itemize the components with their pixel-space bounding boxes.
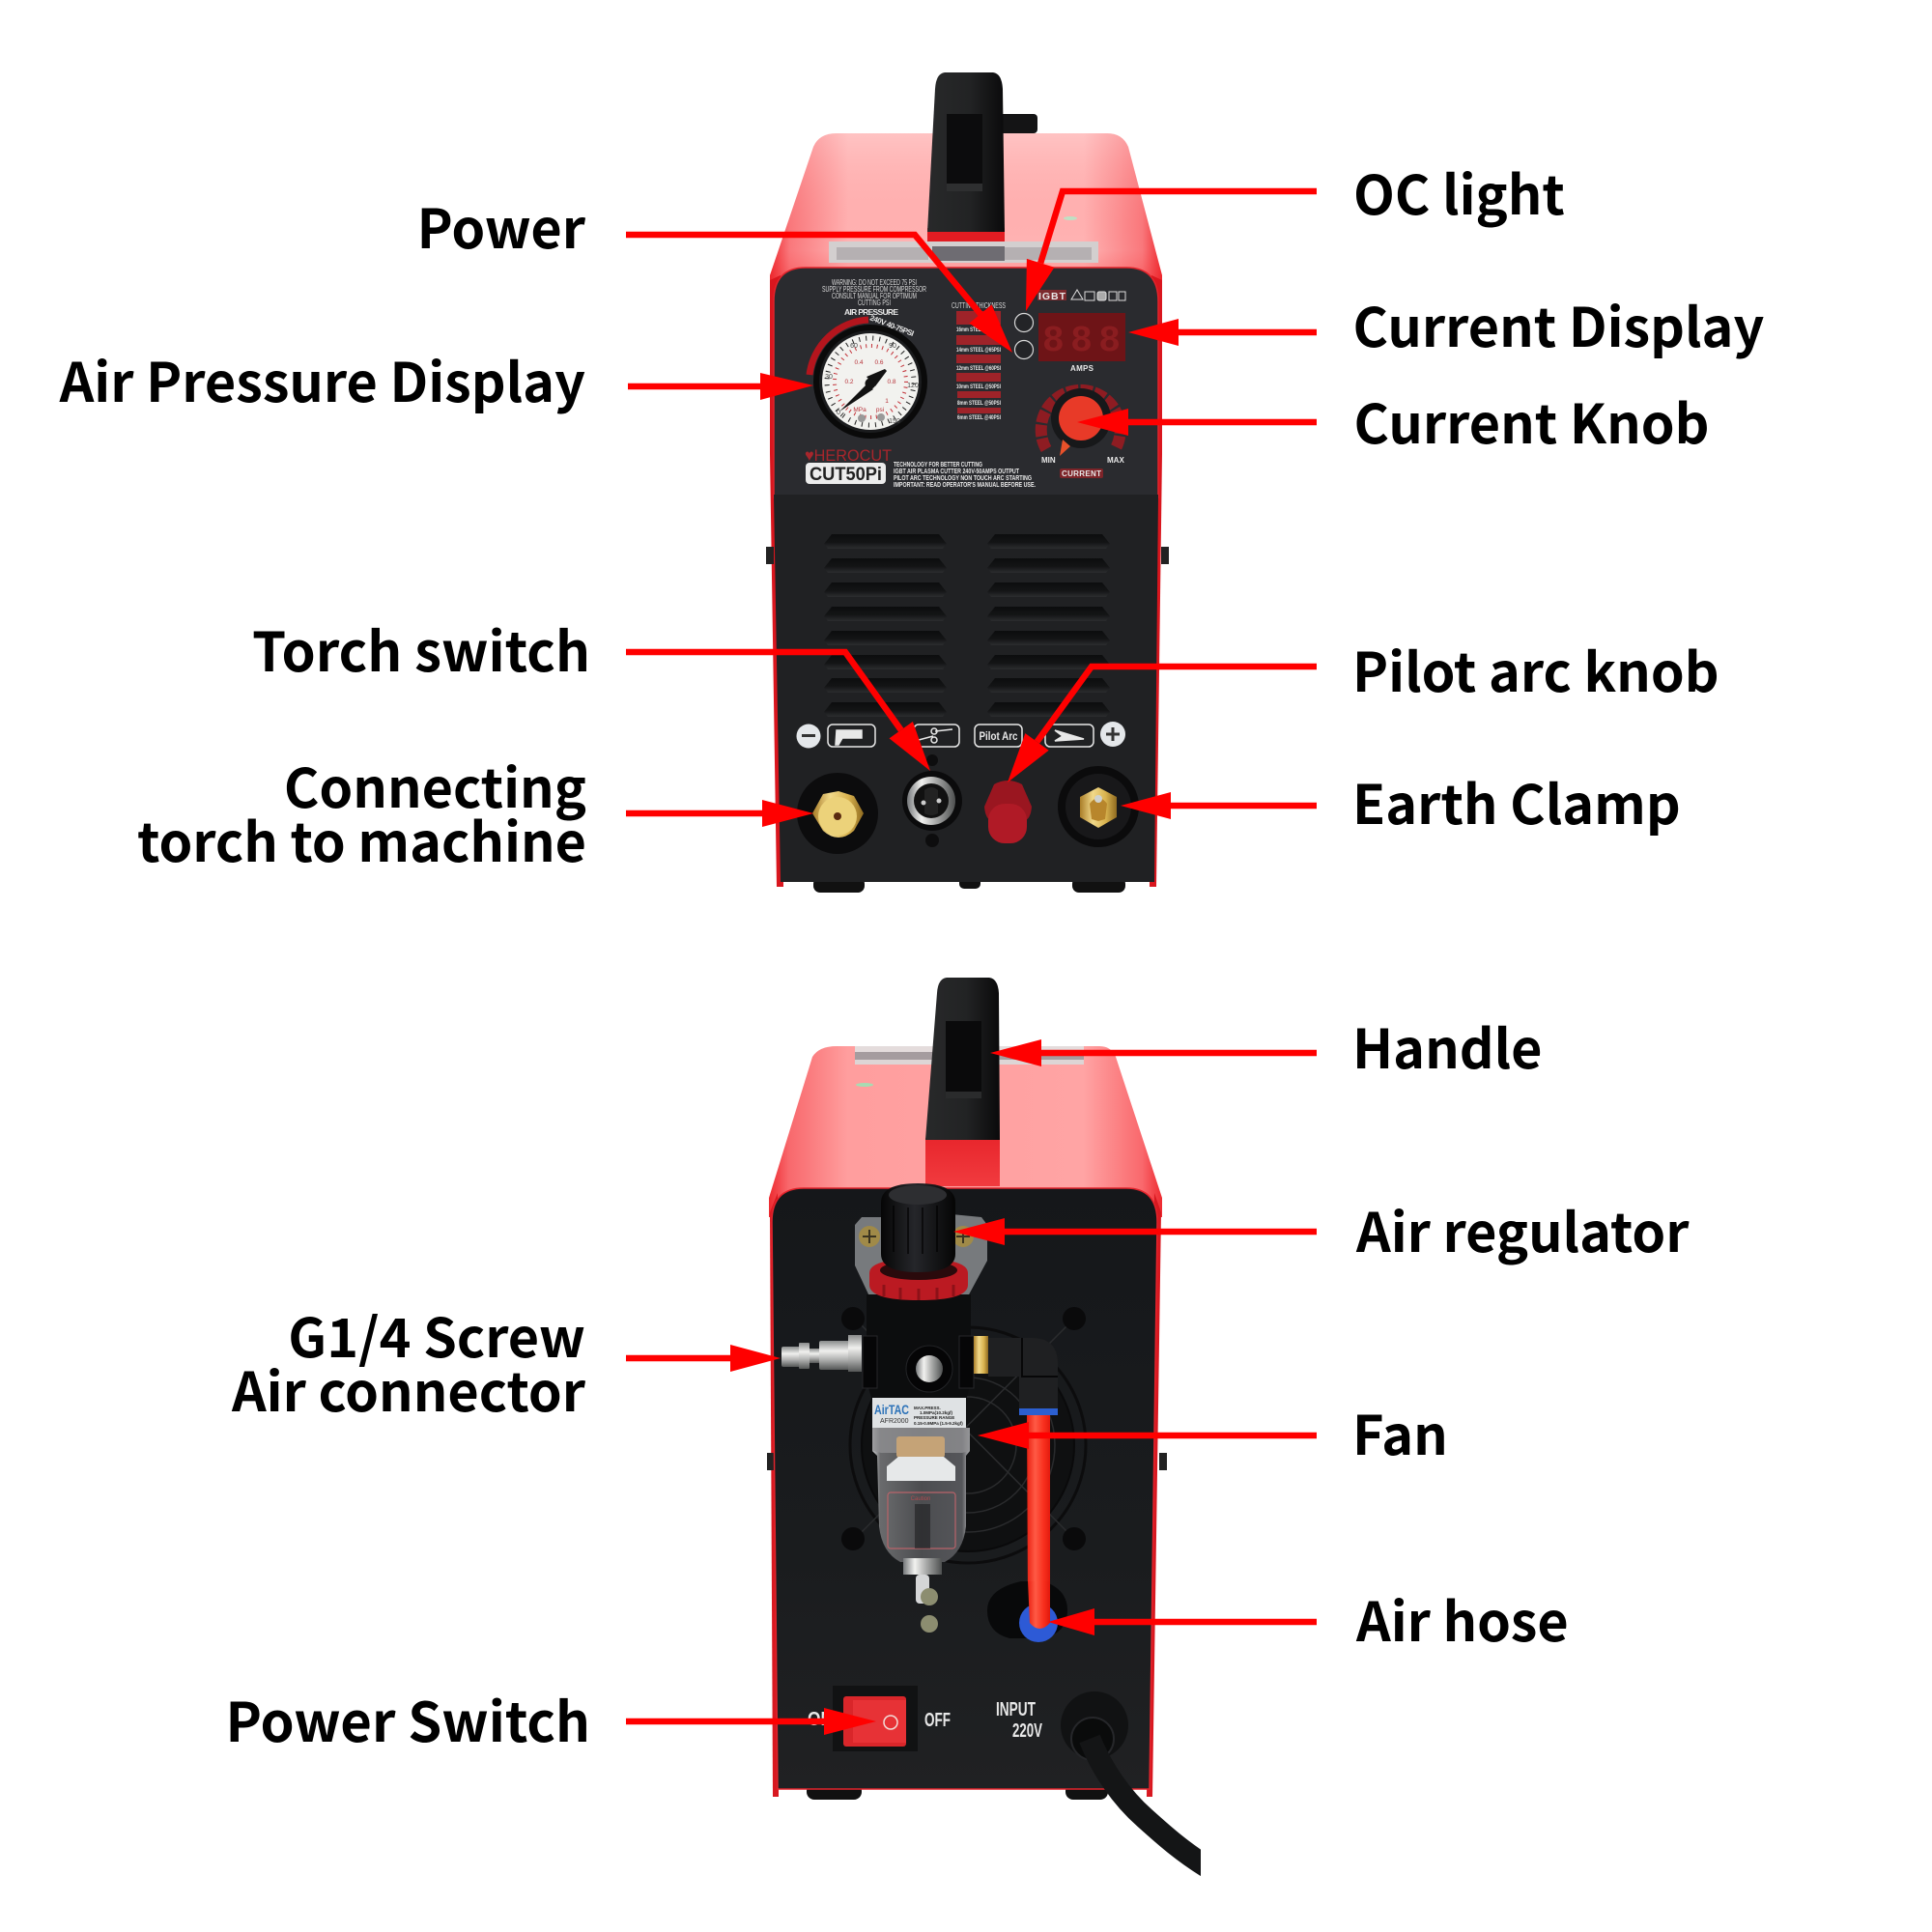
rear panel: [772, 1188, 1157, 1789]
black adjust knob: [881, 1183, 955, 1272]
input voltage label: INPUT: [996, 1699, 1036, 1720]
clamp symbol: [1045, 724, 1094, 747]
rear feet: [807, 1783, 862, 1800]
knob scale labels: [1041, 456, 1124, 465]
tech text: [894, 460, 1036, 489]
arrow: Air hose: [1048, 1608, 1317, 1635]
bracket: [855, 1214, 987, 1296]
arrow: Fan: [978, 1422, 1317, 1449]
control panel: [774, 268, 1158, 497]
arrow: OC light: [1026, 191, 1317, 311]
voltage range text: 240V 40-75PSI: [868, 313, 915, 338]
rear side strips: [770, 1193, 779, 1797]
switch symbol: [914, 724, 959, 747]
air hose: [1027, 1415, 1051, 1627]
tech text: IMPORTANT: READ OPERATOR'S MANUAL BEFORE USE.: [894, 480, 1036, 489]
airtac label: 1.0MPa(10.2kgf): [920, 1410, 953, 1415]
airtac label: AirTAC: [874, 1402, 909, 1417]
arrow: Current Knob: [1077, 409, 1317, 436]
label: Connecting torch to machine: Connecting: [284, 746, 586, 824]
earth clamp socket: [1058, 766, 1139, 847]
pilot arc badge: Pilot Arc: [980, 731, 1018, 743]
tech text: IGBT AIR PLASMA CUTTER 240V-50AMPS OUTPUT: [894, 467, 1019, 475]
front view machine: [766, 72, 1169, 893]
gauge: 90: [889, 343, 896, 350]
arrow: Connecting torch: [626, 800, 813, 827]
gauge: 0.6: [874, 359, 884, 366]
airtac label: PRESSURE RANGE: [914, 1415, 954, 1420]
label: Handle: Handle: [1352, 1007, 1543, 1085]
side bolts: [766, 547, 774, 564]
arrow: Power: [626, 235, 1012, 353]
arrow: Air regulator: [953, 1218, 1317, 1245]
warning text: SUPPLY PRESSURE FROM COMPRESSOR: [822, 284, 926, 294]
brand: ♥HEROCUT: [805, 446, 892, 465]
quick connector: [781, 1335, 862, 1372]
body: [867, 1294, 971, 1401]
gauge: 0: [837, 410, 840, 416]
knob scale labels: MIN: [1041, 456, 1056, 465]
label: Fan: Fan: [1352, 1393, 1448, 1471]
cutting thickness chart: 10mm STEEL @50PSI: [956, 384, 1001, 390]
cutting thickness chart: 14mm STEEL @65PSI: [956, 347, 1001, 354]
label: Current Display: Current Display: [1352, 285, 1764, 363]
handle knob behind: [995, 114, 1037, 133]
cutting thickness chart: 6mm STEEL @40PSI: [957, 414, 1001, 421]
torch symbol: [828, 724, 875, 747]
handle: [927, 72, 1005, 242]
torch connector: [797, 773, 878, 854]
airtac label: AFR2000: [880, 1418, 909, 1425]
cable hole: [987, 1581, 1067, 1642]
vent louvers: [824, 534, 1110, 717]
cutting thickness chart: CUTTING THICKNESS: [952, 301, 1006, 310]
arrow: Current Display: [1128, 319, 1317, 346]
drain screws: [921, 1588, 938, 1605]
airtac label: 0.15-0.9MPa (1.5-9.2kgf): [914, 1421, 963, 1426]
label: Power: Power: [417, 186, 586, 265]
arrow: G1/4 connector: [626, 1345, 781, 1372]
gauge: 60: [850, 343, 858, 350]
label: Air Pressure Display: Air Pressure Display: [59, 340, 585, 418]
certification icons: IGBT: [1038, 291, 1066, 302]
arrow: Pilot arc knob: [1008, 667, 1317, 782]
gauge: 150: [889, 418, 900, 425]
arrow: Power Switch: [626, 1708, 876, 1735]
warning text: CONSULT MANUAL FOR OPTIMUM: [832, 291, 917, 300]
label: G1/4 Screw Air connector: G1/4 Screw: [288, 1295, 585, 1374]
label: Pilot arc knob: Pilot arc knob: [1352, 630, 1719, 708]
side tabs: [863, 1336, 877, 1388]
center screw: [906, 1346, 952, 1392]
red collar: [869, 1259, 968, 1300]
label: Power Switch: Power Switch: [225, 1680, 590, 1758]
label: Air hose: Air hose: [1355, 1579, 1569, 1658]
certification icons: [1037, 290, 1125, 302]
gauge: psi: [876, 407, 884, 413]
cutting thickness chart: 16mm STEEL @65PSI: [956, 327, 1001, 333]
rocker switch: [833, 1686, 918, 1751]
top sticker: [829, 242, 1098, 263]
pilot arc knob: [984, 781, 1032, 843]
label: OC light: OC light: [1353, 153, 1565, 231]
on off labels: [808, 1709, 951, 1731]
gauge: 30: [825, 374, 833, 381]
filter bowl: Caution: [911, 1496, 930, 1502]
arrow: Air Pressure Display: [628, 373, 813, 400]
current display: 888: [1042, 321, 1121, 362]
gauge: MPa: [853, 407, 867, 413]
red side strips: [770, 275, 783, 887]
air pressure heading: AIR PRESSURE: [844, 307, 898, 317]
current knob: [1041, 388, 1121, 456]
input voltage label: 220V: [1012, 1720, 1042, 1742]
airtac label: [872, 1398, 966, 1428]
cutting thickness chart: [952, 301, 1006, 421]
torch switch socket: [902, 754, 962, 847]
gauge: 0.4: [854, 359, 864, 366]
airtac label: MAX.PRESS.: [914, 1406, 941, 1410]
pilot arc badge: [975, 724, 1022, 747]
cutting thickness chart: 8mm STEEL @50PSI: [957, 400, 1001, 407]
knob scale labels: MAX: [1107, 456, 1124, 465]
current badge: CURRENT: [1062, 469, 1101, 478]
gauge: [810, 320, 931, 442]
warning text: CUTTING PSI: [858, 298, 891, 307]
feet: [813, 877, 865, 893]
fan screws: [841, 1307, 1086, 1550]
rear view machine: [767, 978, 1212, 1870]
tech text: PILOT ARC TECHNOLOGY NON TOUCH ARC STARTING: [894, 473, 1032, 482]
gauge: 1: [885, 398, 889, 405]
rear green led: [856, 1083, 873, 1087]
power cord: [1061, 1691, 1212, 1870]
elbow fitting: [974, 1336, 1058, 1415]
rear handle: [925, 978, 1000, 1186]
warning text: WARNING: DO NOT EXCEED 75 PSI: [832, 277, 917, 287]
gauge: 0.8: [887, 379, 896, 385]
on off labels: OFF: [924, 1710, 951, 1731]
amps label: AMPS: [1070, 364, 1094, 373]
arrow: Handle: [990, 1039, 1317, 1066]
lower panel: [774, 495, 1158, 882]
on off labels: ON: [808, 1709, 833, 1730]
label: G1/4 Screw Air connector: Air connector: [231, 1350, 586, 1428]
gauge: 0.2: [844, 379, 854, 385]
model plate: CUT50Pi: [810, 465, 882, 485]
rear sticker: [855, 1046, 1084, 1065]
lid top: [770, 133, 1162, 290]
rear lid: [769, 1046, 1162, 1217]
plus symbol: [1100, 722, 1125, 747]
label: Air regulator: Air regulator: [1355, 1190, 1690, 1268]
label: Current Knob: Current Knob: [1354, 382, 1709, 460]
gauge: 120: [907, 383, 919, 389]
cutting thickness chart: 12mm STEEL @60PSI: [956, 365, 1001, 372]
OC and power indicator lights: [1014, 313, 1034, 359]
label: Torch switch: Torch switch: [252, 610, 590, 688]
arrow: Torch switch: [626, 652, 930, 771]
label: Connecting torch to machine: torch to machine: [137, 800, 586, 878]
tech text: TECHNOLOGY FOR BETTER CUTTING: [894, 460, 982, 469]
label: Earth Clamp: Earth Clamp: [1352, 762, 1681, 840]
air regulator: [855, 1183, 987, 1633]
rear bolts: [767, 1453, 774, 1470]
green led: [1064, 216, 1077, 220]
warning text: [822, 277, 926, 307]
minus symbol: [796, 724, 821, 748]
filter bowl: [872, 1428, 970, 1604]
arrow: Earth Clamp: [1121, 792, 1317, 819]
input voltage label: [996, 1699, 1042, 1742]
fan: [850, 1319, 1086, 1563]
